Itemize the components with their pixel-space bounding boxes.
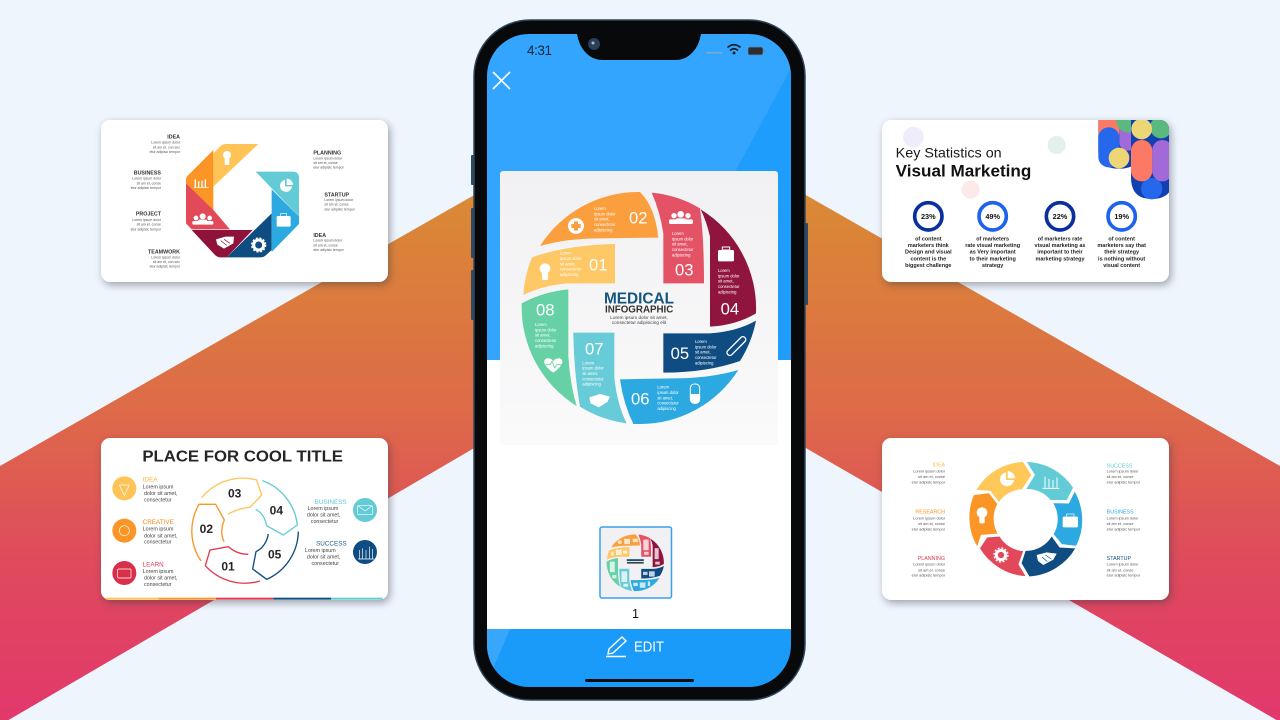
stat 49%: to their marketing — [970, 256, 1016, 262]
card: ring infographic — [882, 438, 1169, 600]
icon: bulb — [977, 507, 987, 523]
segment text: Lorem — [560, 251, 572, 256]
segment numbers: 03 — [675, 260, 694, 279]
octagon diagram — [186, 144, 299, 257]
labels left: etur adipisic tempor — [131, 227, 162, 231]
ring numbers: 04 — [270, 503, 283, 517]
labels right: etur adipisic tempor — [313, 248, 345, 252]
segment text: ipsum dolor — [672, 236, 694, 241]
icon: handshake — [1037, 552, 1057, 565]
success item — [305, 540, 377, 567]
idea item: dolor sit amet, — [144, 491, 177, 497]
ring diagram — [192, 478, 298, 583]
segment text: Lorem — [657, 385, 670, 390]
card: octagon infographic — [101, 120, 388, 282]
labels left: PROJECT — [136, 212, 162, 218]
icon: pie — [1000, 471, 1015, 486]
segment text: ipsum dolor — [582, 366, 604, 371]
medical image — [500, 171, 778, 445]
icon: chart — [1043, 477, 1059, 488]
segment numbers: 08 — [536, 300, 555, 319]
stat 19%: is nothing without — [1098, 256, 1145, 262]
labels right: etur adipisic tempor — [324, 207, 356, 211]
left labels: sit am et, conse — [918, 475, 945, 479]
segment text: adipiscing — [672, 252, 691, 257]
icon: people — [192, 213, 213, 225]
segments — [522, 192, 756, 424]
heading: PLACE FOR COOL TITLE — [142, 448, 343, 465]
stat 22%: important to their — [1037, 250, 1084, 256]
icon: gear — [994, 548, 1008, 562]
heading: Visual Marketing — [896, 161, 1031, 180]
camera — [588, 38, 600, 50]
labels left: etur adipisic tempor — [150, 150, 181, 154]
stat 23%: biggest challenge — [905, 263, 951, 269]
segment text: adipiscing — [718, 289, 737, 294]
thumbnail — [600, 527, 672, 598]
icon: handshake — [216, 237, 234, 249]
stat 23%: marketers think — [908, 243, 950, 249]
icon: pencil — [606, 637, 626, 656]
segment numbers: 04 — [721, 300, 739, 319]
stat 19%: marketers say that — [1097, 243, 1146, 249]
left labels: etur adipisic tempor — [912, 527, 946, 531]
segment numbers: 02 — [629, 208, 648, 227]
left labels: Lorem ipsum dolor — [913, 563, 946, 567]
edit bar — [487, 629, 791, 689]
segment text: Lorem — [582, 360, 595, 365]
right labels: sit am et, conse — [1107, 568, 1133, 572]
phone body — [474, 20, 805, 700]
home indicator — [585, 679, 694, 682]
success item: consectetur — [311, 561, 339, 567]
icon: bulb — [223, 151, 231, 165]
creative item: Lorem ipsum — [143, 527, 174, 533]
segment text: sit amet, — [582, 371, 598, 376]
stat 22% — [1035, 203, 1085, 262]
segment numbers — [536, 208, 739, 409]
right labels: STARTUP — [1107, 556, 1131, 562]
business item: BUSINESS — [315, 499, 347, 506]
labels right: etur adipisic tempor — [313, 166, 345, 170]
labels right: IDEA — [313, 233, 326, 239]
labels right — [313, 151, 356, 252]
learn item: LEARN — [143, 561, 164, 568]
segment text: ipsum dolor — [695, 344, 717, 349]
success item: SUCCESS — [316, 541, 347, 548]
success item: dolor sit amet, — [307, 555, 340, 561]
segment text: sit amet, — [594, 217, 610, 222]
left labels: PLANNING — [918, 556, 945, 562]
left labels: sit am et, conse — [918, 568, 945, 572]
heading: Key Statistics on — [896, 144, 1002, 160]
phone — [471, 20, 808, 700]
decorative blobs — [903, 120, 1169, 200]
medical icons — [540, 211, 747, 407]
ring numbers: 01 — [221, 560, 235, 574]
segment numbers: 01 — [589, 256, 608, 275]
right labels: etur adipisic tempor — [1107, 481, 1141, 485]
stat 22%: 22% — [1053, 212, 1068, 221]
right labels: etur adipisic tempor — [1107, 574, 1141, 578]
heading — [896, 148, 1030, 180]
right labels: sit am et, conse — [1107, 522, 1133, 526]
business item: consectetur — [311, 519, 339, 525]
labels right: sit am et, conse — [324, 203, 349, 207]
segment text: sit amet, — [718, 279, 734, 284]
stat 49%: rate visual marketing — [965, 243, 1020, 249]
card: key statistics — [882, 105, 1173, 282]
segment text: sit amet, — [657, 395, 673, 400]
labels right: Lorem ipsum dolor — [324, 198, 354, 202]
labels right: PLANNING — [313, 151, 341, 157]
segment numbers: 05 — [671, 344, 689, 363]
segment text: ipsum dolor — [535, 327, 557, 332]
right labels — [1107, 463, 1141, 578]
segment text: consectetur — [560, 267, 582, 272]
right labels: Lorem ipsum dolor — [1107, 563, 1139, 567]
segment text: adipiscing — [560, 272, 579, 277]
labels right: sit am et, conse — [313, 243, 338, 247]
segment text: consectetur — [718, 284, 740, 289]
learn item — [112, 561, 177, 588]
right labels: BUSINESS — [1107, 510, 1134, 516]
labels left: Lorem ipsum dolor — [132, 218, 162, 222]
arrow ring diagram — [969, 461, 1083, 577]
stat 22%: of marketers rate — [1038, 236, 1082, 242]
icon: bar chart — [194, 179, 209, 188]
segment text: sit amet, — [695, 350, 711, 355]
left labels: etur adipisic tempor — [912, 481, 946, 485]
close icon — [493, 72, 510, 89]
segment text: adipiscing — [695, 360, 714, 365]
segment text: ipsum dolor — [657, 390, 679, 395]
learn item: consectetur — [144, 582, 172, 588]
icon: briefcase — [277, 214, 291, 227]
segment text: consectetur — [535, 338, 557, 343]
color strip — [106, 598, 383, 600]
segment text: consectetur — [582, 376, 604, 381]
segment text: Lorem — [672, 231, 684, 236]
creative item: consectetur — [144, 540, 172, 546]
status icons — [706, 45, 765, 55]
status time: 4:31 — [527, 43, 552, 58]
labels right: STARTUP — [324, 192, 350, 198]
stat 23%: Design and visual — [905, 250, 952, 256]
segment text: ipsum dolor — [560, 256, 582, 261]
stat 19% — [1097, 203, 1146, 269]
stat 49%: as Very important — [970, 250, 1016, 256]
notch — [577, 34, 701, 60]
business item: dolor sit amet, — [307, 513, 340, 519]
page number: 1 — [632, 607, 639, 621]
segment text: sit amet, — [560, 261, 576, 266]
segment numbers: 06 — [631, 390, 650, 409]
labels left: Lorem ipsum dolor — [132, 177, 162, 181]
segment text: ipsum dolor — [718, 273, 740, 278]
stat 19%: of content — [1108, 236, 1135, 242]
learn item: Lorem ipsum — [143, 569, 174, 575]
left labels: etur adipisic tempor — [912, 574, 946, 578]
left labels: sit am et, conse — [918, 522, 945, 526]
labels left: etur adipisic tempor — [150, 265, 181, 269]
icon: pie — [280, 179, 293, 192]
stat 49%: 49% — [985, 212, 1000, 221]
idea item: consectetur — [144, 497, 172, 503]
right labels: Lorem ipsum dolor — [1107, 469, 1139, 473]
labels left: sit am et, con sec — [153, 145, 180, 149]
idea item: IDEA — [143, 476, 158, 483]
right gradient band — [804, 194, 1280, 720]
medical title: Lorem ipsum dolor sit amet, — [610, 315, 668, 320]
stat 22%: visual marketing as — [1035, 243, 1085, 249]
idea item — [112, 476, 177, 503]
segment text: sit amet, — [672, 242, 688, 247]
labels left: IDEA — [167, 134, 180, 140]
ring numbers: 05 — [268, 548, 282, 562]
phone screen — [487, 34, 791, 689]
segment text: adipiscing — [594, 227, 613, 232]
icon: briefcase — [1063, 514, 1078, 527]
labels right: Lorem ipsum dolor — [313, 156, 343, 160]
idea item: Lorem ipsum — [143, 484, 174, 490]
segment text: Lorem — [594, 206, 606, 211]
stat 23% — [905, 203, 952, 269]
labels left: sit am et, con sec — [153, 260, 180, 264]
segment text: consectetur — [695, 355, 717, 360]
labels left: sit am et, conse — [137, 181, 161, 185]
business item: Lorem ipsum — [308, 506, 339, 512]
ring numbers: 03 — [228, 487, 242, 501]
ring numbers: 02 — [200, 522, 213, 536]
left labels: IDEA — [933, 462, 945, 468]
stat 19%: their strategy — [1104, 250, 1140, 256]
creative item — [112, 519, 177, 546]
stat 23%: of content — [915, 236, 942, 242]
right labels: etur adipisic tempor — [1107, 527, 1141, 531]
ring numbers — [200, 487, 283, 574]
segment text: sit amet, — [535, 333, 551, 338]
left labels: RESEARCH — [915, 510, 945, 516]
segment text: adipiscing — [582, 382, 602, 387]
left labels: Lorem ipsum dolor — [913, 516, 946, 520]
labels left — [131, 134, 181, 269]
left labels — [912, 462, 946, 578]
learn item: dolor sit amet, — [144, 576, 177, 582]
labels right: sit am et, conse — [313, 161, 338, 165]
stat 19%: visual content — [1103, 263, 1140, 269]
segment numbers: 07 — [585, 339, 604, 358]
stat 22%: marketing strategy — [1035, 256, 1085, 262]
phone side buttons — [471, 155, 808, 320]
right labels: SUCCESS — [1107, 463, 1133, 469]
stat 23%: content is the — [911, 256, 946, 262]
right labels: sit am et, conse — [1107, 475, 1133, 479]
labels left: sit am et, conse — [137, 223, 161, 227]
segment text — [535, 206, 740, 411]
medical title: INFOGRAPHIC — [605, 304, 673, 315]
icon: gear — [252, 238, 266, 252]
labels left: Lorem ipsum dolor — [151, 141, 181, 145]
stat 49% — [965, 203, 1020, 269]
creative item: dolor sit amet, — [144, 533, 177, 539]
medical title: MEDICAL — [604, 290, 674, 307]
business item — [307, 498, 377, 525]
stat 19%: 19% — [1114, 212, 1129, 221]
labels left: Lorem ipsum dolor — [151, 255, 181, 259]
labels left: etur adipisic tempor — [131, 186, 162, 190]
medical title: consectetur adipisicing elit — [612, 320, 667, 325]
creative item: CREATIVE — [143, 519, 174, 526]
segment text: consectetur — [657, 401, 679, 406]
edit label: EDIT — [634, 640, 664, 656]
labels left: TEAMWORK — [148, 249, 180, 255]
segment text: adipiscing — [535, 343, 554, 348]
stat 23%: 23% — [921, 212, 936, 221]
segment text: Lorem — [535, 322, 547, 327]
segment text: consectetur — [594, 222, 616, 227]
segment text: Lorem — [695, 339, 707, 344]
segment text: consectetur — [672, 247, 694, 252]
labels right: Lorem ipsum dolor — [313, 239, 343, 243]
segment text: adipiscing — [657, 406, 677, 411]
success item: Lorem ipsum — [305, 548, 336, 554]
segment text: Lorem — [718, 268, 730, 273]
stat 49%: strategy — [982, 263, 1004, 269]
left gradient band — [0, 194, 476, 720]
segment text: ipsum dolor — [594, 211, 616, 216]
labels left: BUSINESS — [134, 170, 161, 176]
left labels: Lorem ipsum dolor — [913, 469, 946, 473]
stat 49%: of marketers — [976, 236, 1009, 242]
medical title — [604, 290, 674, 325]
right labels: Lorem ipsum dolor — [1107, 516, 1139, 520]
card: cool title — [101, 438, 388, 600]
